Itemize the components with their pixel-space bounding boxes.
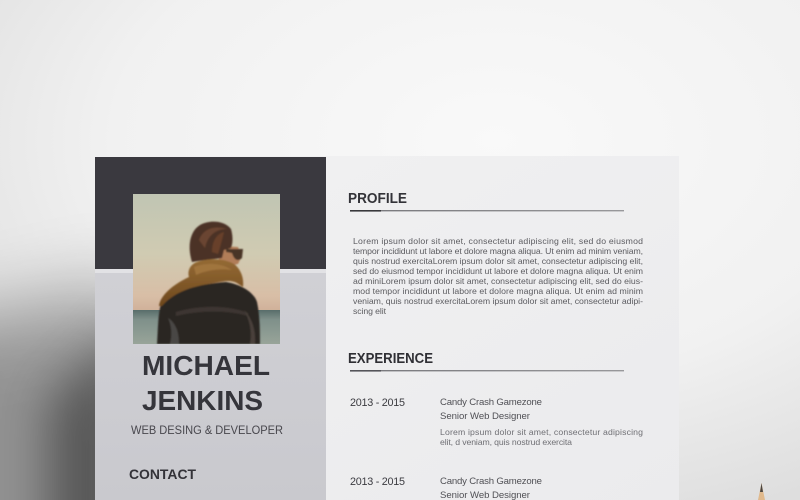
profile body text: mod tempor incididunt ut labore et dolore magna aliqua. Ut enim ad minim (353, 286, 643, 296)
experience entry 1: elit, d veniam, quis nostrud exercita (440, 437, 572, 447)
experience entry 1: Candy Crash Gamezone (440, 397, 542, 408)
experience entry 1 (350, 397, 643, 447)
contact heading: CONTACT (129, 466, 196, 482)
profile body text: ad miniLorem ipsum dolor sit amet, consectetur adipiscing elit, sed do eius- (353, 276, 643, 286)
icon: pencil tip (758, 483, 765, 500)
sunglasses (226, 249, 243, 260)
experience entry 2: 2013 - 2015 (350, 476, 405, 488)
profile body text: veniam, quis nostrud exercitaLorem ipsum dolor sit amet, consectetur adipi- (353, 296, 643, 306)
experience heading rule (350, 370, 624, 372)
experience entry 2: Candy Crash Gamezone (440, 476, 542, 487)
name heading: MICHAEL (142, 350, 270, 381)
resume paper (95, 156, 679, 500)
profile body text: sed do eiusmod tempor incididunt ut labore et dolore magna aliqua. Ut enim (353, 266, 643, 276)
profile heading rule (350, 210, 624, 212)
profile body text: Lorem ipsum dolor sit amet, consectetur adipiscing elit, sed do eiusmod (353, 236, 643, 246)
paper drop shadow (0, 248, 95, 500)
name heading (142, 350, 270, 416)
jacket (157, 282, 260, 344)
face and neck (218, 246, 240, 266)
experience entry 2 (350, 476, 542, 500)
name heading: JENKINS (142, 385, 263, 416)
scarf (159, 259, 243, 306)
panel: sidebar (95, 157, 326, 500)
profile body text: tempor incididunt ut labore et dolore magna aliqua. Ut enim ad minim veniam, (353, 246, 643, 256)
profile body text: scing elit (353, 306, 387, 316)
profile heading: PROFILE (348, 191, 407, 207)
profile body text: quis nostrud exercitaLorem ipsum dolor sit amet, consectetur adipiscing elit, (353, 256, 643, 266)
experience entry 1: Lorem ipsum dolor sit amet, consectetur adipiscing (440, 427, 643, 437)
hair (190, 222, 232, 262)
experience entry 1: 2013 - 2015 (350, 397, 405, 409)
experience heading: EXPERIENCE (348, 351, 433, 367)
job title: WEB DESING & DEVELOPER (131, 425, 283, 437)
profile body text (353, 236, 643, 316)
experience entry 1: Senior Web Designer (440, 411, 531, 422)
portrait photo (133, 194, 280, 344)
sidebar dark header (95, 157, 326, 269)
